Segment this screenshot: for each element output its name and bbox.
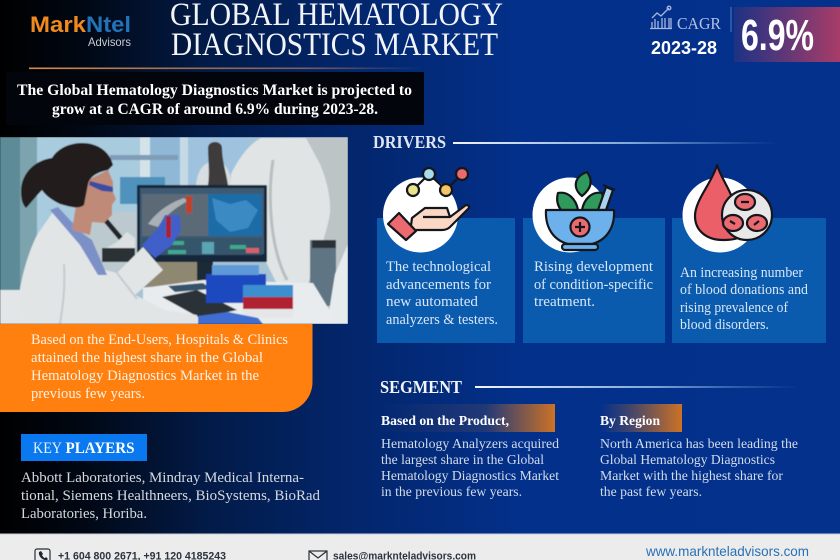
footer: www.marknteladvisors.com [645, 543, 809, 559]
icon: mortar with herbs [546, 172, 615, 250]
segment: product [381, 404, 559, 500]
key players heading [21, 434, 147, 461]
panel: driver 2 treatment: Rising development [534, 259, 653, 275]
panel: driver 1 technology: new automated [386, 294, 479, 310]
key players list [21, 470, 320, 522]
intro banner [6, 72, 424, 125]
intro banner: The Global Hematology Diagnostics Market is projected to [17, 82, 412, 99]
icon: hand with nodes [388, 168, 469, 240]
CAGR block: 2023-28 [651, 38, 717, 58]
icon: phone [35, 549, 50, 560]
panel: driver 3 blood [672, 165, 826, 343]
panel: driver 1 technology: The technological [386, 259, 491, 275]
segment: region: Market with the highest share for [600, 469, 783, 484]
key players heading: PLAYERS [66, 440, 135, 457]
segment: region: the past few years. [600, 485, 702, 500]
intro banner: grow at a CAGR of around 6.9% during 2023-28. [52, 101, 378, 118]
panel: driver 2 treatment: treatment. [534, 294, 595, 310]
blue rack [206, 265, 266, 303]
keyboard [162, 290, 237, 318]
segment: product: Hematology Analyzers acquired [381, 437, 559, 452]
back person [196, 138, 330, 284]
panel: driver 2 treatment [523, 172, 665, 343]
panel: driver 1 technology: advancements for [386, 277, 491, 293]
key players list: tional, Siemens Healthneers, BioSystems, BioRad [21, 488, 320, 504]
title [170, 0, 503, 63]
desk [143, 280, 338, 324]
callout: end users: Based on the End-Users, Hospitals & Clinics [31, 332, 288, 348]
photo: lab scientist at monitor [0, 137, 348, 324]
red tube rack [242, 284, 294, 310]
logo [30, 12, 131, 49]
panel: driver 3 blood: blood disorders. [680, 317, 769, 333]
monitor [137, 185, 267, 284]
segment: region: By Region [600, 414, 660, 429]
logo: Mark [30, 12, 87, 37]
woman coat [16, 207, 197, 324]
segment: region [600, 404, 798, 500]
panel: driver 3 blood: rising prevalence of [680, 300, 788, 316]
microscope [102, 218, 135, 262]
title: DIAGNOSTICS MARKET [171, 27, 498, 63]
segment: product: Hematology Diagnostics Market [381, 469, 559, 484]
footer [0, 534, 840, 560]
icon: envelope [309, 551, 327, 560]
icon: growth chart [650, 6, 672, 28]
drivers heading: DRIVERS [373, 132, 446, 152]
segment: product: in the previous few years. [381, 485, 522, 500]
key players list: Abbott Laboratories, Mindray Medical Interna- [21, 470, 304, 486]
panel: driver 2 treatment: of condition-specific [534, 277, 653, 293]
logo: Ntel [86, 12, 131, 37]
face [72, 170, 116, 235]
glove and tube [142, 215, 181, 258]
key players list: Laboratories, Horiba. [21, 506, 147, 522]
segment: product: the largest share in the Global [381, 453, 544, 468]
callout: end users [0, 324, 312, 412]
panel: driver 1 technology: analyzers & testers. [386, 312, 498, 328]
hair [21, 143, 113, 208]
panel: driver 3 blood: of blood donations and [680, 282, 809, 298]
segment: region: North America has been leading the [600, 437, 798, 452]
CAGR block: CAGR [677, 14, 722, 33]
segment heading: SEGMENT [380, 377, 462, 397]
safety glasses [89, 181, 113, 192]
icon: blood drop and cells [695, 165, 772, 240]
logo: Advisors [88, 35, 131, 49]
CAGR block [650, 6, 840, 62]
panel: driver 1 technology [377, 168, 515, 343]
segment: product: Based on the Product, [381, 414, 509, 429]
segment: region: Global Hematology Diagnostics [600, 453, 775, 468]
panel: driver 3 blood: An increasing number [680, 265, 803, 281]
callout: end users: Hematology Diagnostics Market in the [31, 368, 259, 384]
callout: end users: attained the highest share in the Global [31, 350, 263, 366]
callout: end users: previous few years. [31, 386, 145, 402]
key players heading: KEY [33, 440, 62, 457]
CAGR block: 6.9% [741, 11, 814, 60]
